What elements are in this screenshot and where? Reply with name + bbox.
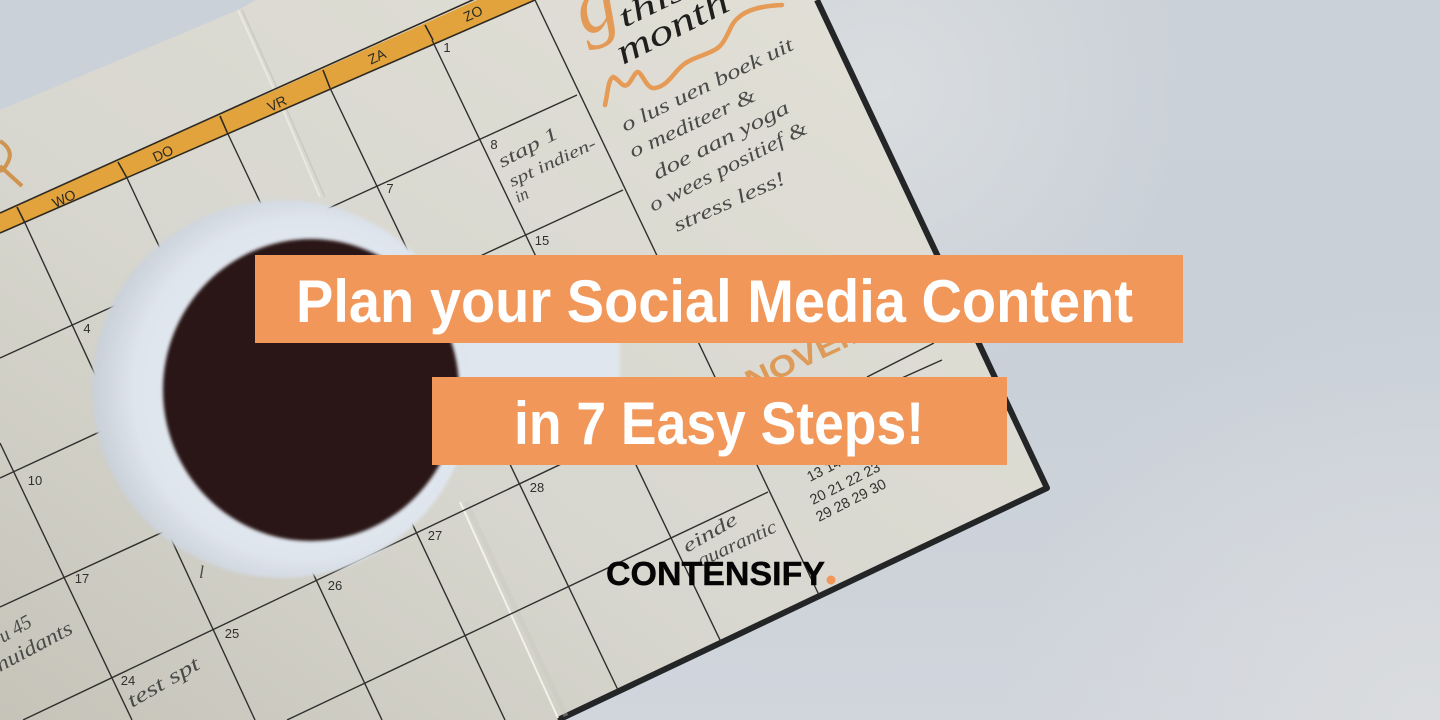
open planner book bbox=[0, 0, 1047, 720]
handwritten notes: doe aan yoga bbox=[649, 97, 793, 184]
day numbers: 24 bbox=[121, 673, 135, 688]
handwritten notes: spt indien- bbox=[506, 133, 599, 191]
cup handle bbox=[450, 300, 620, 400]
weekday labels: VR bbox=[265, 92, 289, 115]
handwritten notes: quarantic bbox=[694, 516, 781, 572]
goals of this month lettering bbox=[559, 0, 782, 105]
handwritten notes: o mediteer & bbox=[626, 84, 760, 163]
handwritten notes: stap 1 bbox=[494, 123, 562, 172]
day numbers: 8 bbox=[490, 137, 498, 152]
book dark edge bbox=[558, 0, 1047, 720]
day numbers: 17 bbox=[75, 571, 89, 586]
handwritten notes: in bbox=[512, 184, 532, 207]
day numbers: 1 bbox=[443, 40, 451, 55]
handwritten notes: o wees positief & bbox=[645, 117, 812, 216]
handwritten notes: einde bbox=[679, 509, 741, 557]
handwritten notes: test spt bbox=[122, 651, 205, 712]
day numbers: 28 bbox=[530, 480, 544, 495]
mini calendar numbers: 20 21 22 23 bbox=[808, 460, 883, 509]
day numbers: 25 bbox=[225, 626, 239, 641]
orange letter fragment bbox=[0, 141, 22, 186]
title banner line 2: in 7 Easy Steps! bbox=[514, 390, 924, 457]
weekday labels: ZO bbox=[461, 2, 485, 25]
weekday labels: DO bbox=[150, 142, 176, 165]
calendar grid bbox=[0, 0, 942, 720]
day numbers: 10 bbox=[28, 473, 42, 488]
title banner line 2 bbox=[432, 377, 1007, 465]
handwritten notes: l bbox=[199, 562, 204, 582]
day numbers: 26 bbox=[328, 578, 342, 593]
cup body bbox=[92, 200, 472, 578]
logo: Contensify: CONTENSIFY bbox=[606, 555, 825, 592]
NOVEMBER heading: NOVEMBER bbox=[740, 282, 940, 398]
mini calendar numbers bbox=[805, 437, 889, 526]
title banner line 1: Plan your Social Media Content bbox=[296, 268, 1133, 335]
handwritten notes: o lus uen boek uit bbox=[618, 34, 798, 136]
handwritten notes bbox=[0, 34, 812, 712]
handwritten notes: stress less! bbox=[670, 168, 789, 237]
day numbers: 4 bbox=[83, 321, 91, 336]
weekday labels bbox=[50, 2, 485, 211]
day numbers: 27 bbox=[428, 528, 442, 543]
orange weekday band bbox=[0, 0, 535, 233]
coffee cup bbox=[92, 200, 620, 578]
weekday labels: WO bbox=[50, 186, 78, 211]
day numbers: 7 bbox=[386, 181, 394, 196]
spine bbox=[238, 10, 566, 718]
mini calendar numbers: 13 14 21 22 bbox=[805, 437, 880, 486]
day numbers: 15 bbox=[535, 233, 549, 248]
weekday labels: ZA bbox=[365, 45, 389, 67]
day numbers bbox=[28, 40, 549, 688]
mini calendar numbers: 29 28 29 30 bbox=[814, 477, 889, 526]
coffee bbox=[163, 239, 459, 541]
